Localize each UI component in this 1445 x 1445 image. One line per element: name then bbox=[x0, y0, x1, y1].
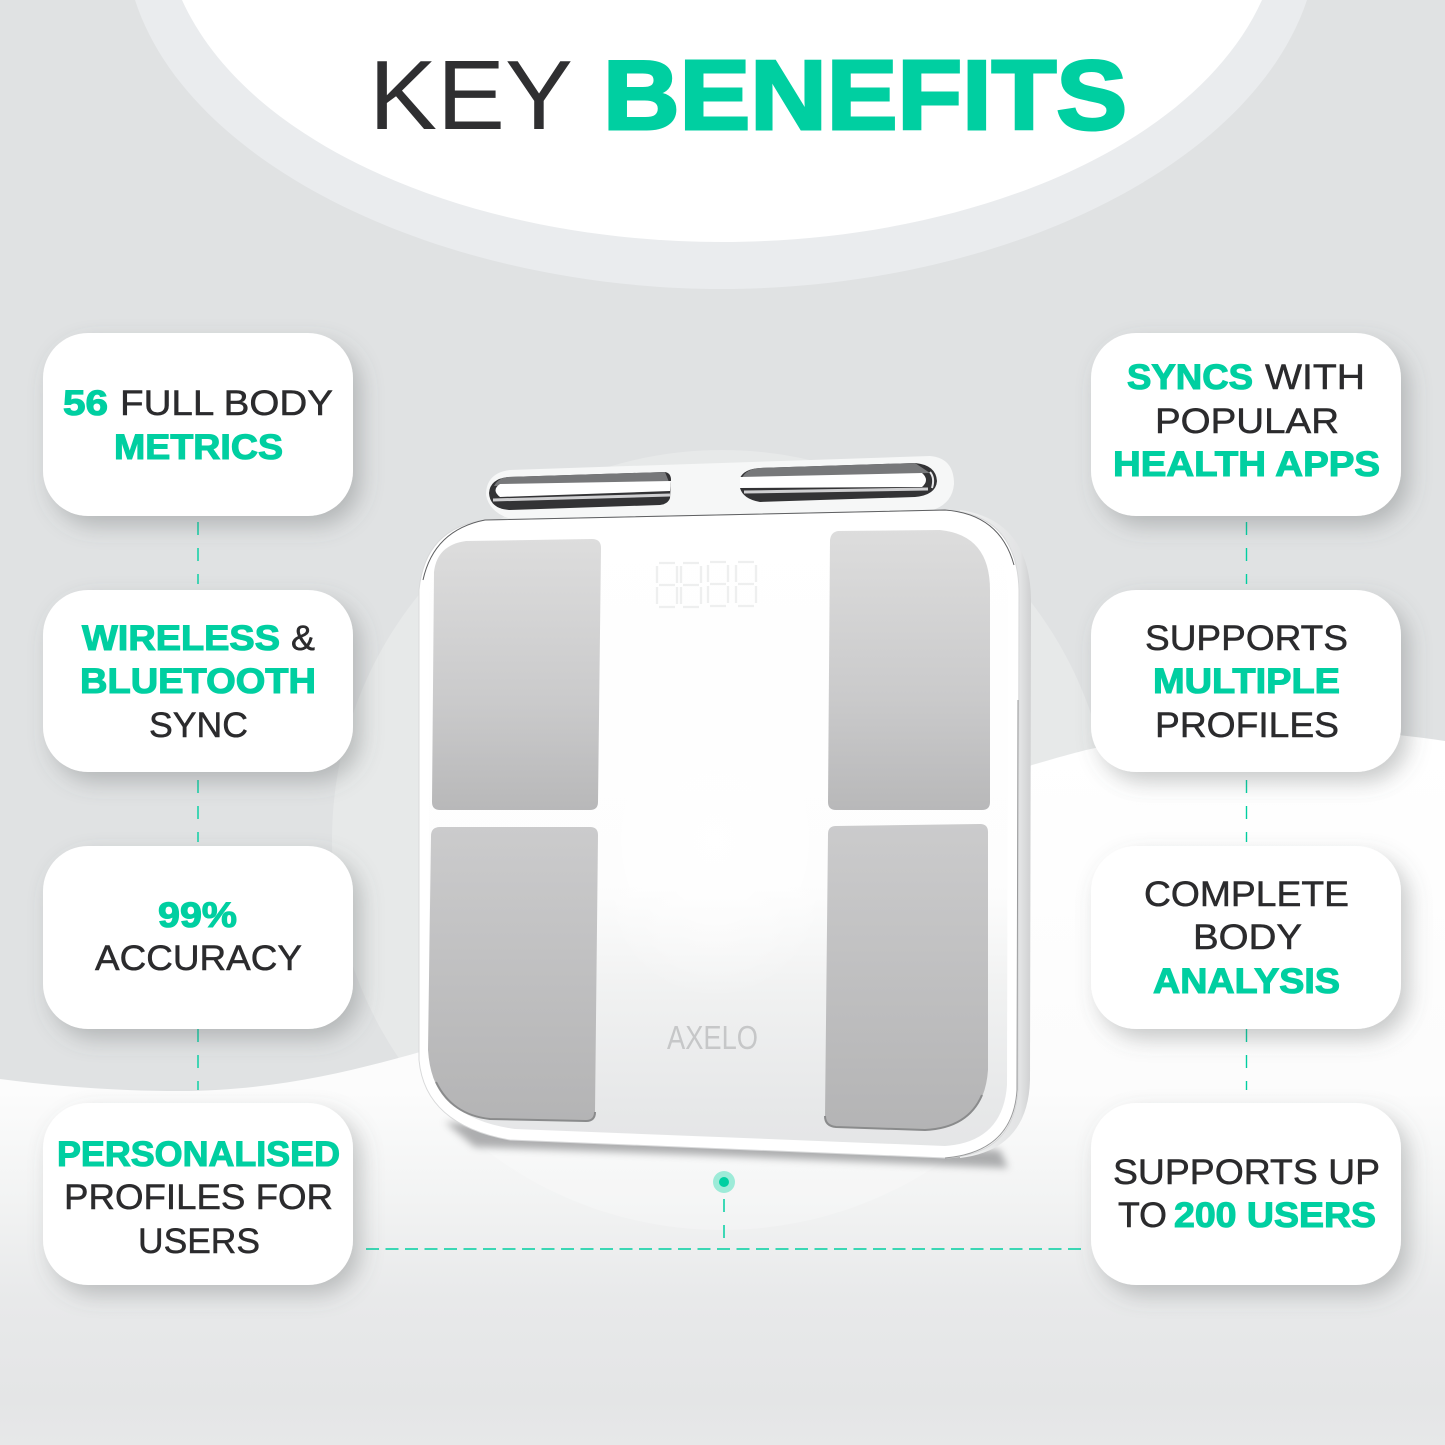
scale face bbox=[429, 520, 1008, 1146]
handle bbox=[486, 456, 954, 521]
panel: wireless and bluetooth sync: SYNC bbox=[149, 706, 248, 745]
panel: 56 full body metrics: 56 bbox=[63, 384, 108, 423]
scale right edge line bbox=[945, 700, 1018, 1158]
panel: wireless and bluetooth sync: BLUETOOTH bbox=[80, 662, 316, 701]
panel: syncs with health apps: HEALTH APPS bbox=[1113, 445, 1380, 484]
panel: supports up to 200 users: TO bbox=[1118, 1196, 1167, 1235]
panel: syncs with health apps: WITH bbox=[1265, 358, 1365, 397]
panel: 56 full body metrics: FULL BODY bbox=[120, 384, 333, 423]
connector: left column bbox=[197, 522, 199, 1090]
panel: wireless and bluetooth sync: & bbox=[291, 619, 315, 658]
panel: supports up to 200 users: 200 USERS bbox=[1174, 1196, 1376, 1235]
connector: right column bbox=[1246, 522, 1248, 1090]
panel: syncs with health apps bbox=[1091, 333, 1401, 516]
panel: 56 full body metrics: METRICS bbox=[114, 428, 283, 467]
panel: 99% accuracy: ACCURACY bbox=[95, 939, 302, 978]
panel: supports multiple profiles: SUPPORTS bbox=[1145, 619, 1348, 658]
header arc: outer bbox=[135, 0, 1307, 289]
panel: personalised profiles bbox=[43, 1103, 353, 1285]
title: BENEFITS bbox=[603, 40, 1127, 150]
scale brand logo: AXELO bbox=[667, 1019, 758, 1056]
foot pad bottom right bbox=[825, 824, 988, 1130]
title: KEY bbox=[369, 40, 573, 150]
foot pad bottom left edge bbox=[436, 1082, 595, 1121]
title bbox=[369, 40, 1127, 150]
right chrome bar bbox=[740, 463, 937, 502]
marker dot bbox=[713, 1171, 735, 1193]
panel: wireless and bluetooth sync bbox=[43, 590, 353, 772]
panel: 56 full body metrics bbox=[43, 333, 353, 516]
foot pad top left bbox=[432, 539, 601, 810]
digit display bbox=[657, 562, 756, 607]
panel: complete body analysis: COMPLETE bbox=[1144, 875, 1349, 914]
panel: complete body analysis: BODY bbox=[1193, 918, 1302, 957]
panel: supports multiple profiles bbox=[1091, 590, 1401, 772]
panel: personalised profiles: PROFILES FOR bbox=[64, 1178, 333, 1217]
panel: syncs with health apps: POPULAR bbox=[1155, 402, 1339, 441]
scale centre glow bbox=[585, 680, 845, 1000]
panel: complete body analysis: ANALYSIS bbox=[1153, 962, 1340, 1001]
panel: complete body analysis bbox=[1091, 846, 1401, 1029]
panel: supports multiple profiles: PROFILES bbox=[1155, 706, 1339, 745]
connector: horizontal bbox=[366, 1248, 1081, 1250]
scale side edge bbox=[960, 510, 1031, 1158]
scale rim bbox=[419, 510, 1019, 1158]
bottom wave panel bbox=[0, 729, 1445, 1445]
panel: supports up to 200 users: SUPPORTS UP bbox=[1113, 1153, 1380, 1192]
header arc: inner bbox=[182, 0, 1262, 242]
panel: syncs with health apps: SYNCS bbox=[1127, 358, 1253, 397]
panel: personalised profiles: PERSONALISED bbox=[57, 1135, 340, 1174]
left chrome bar bbox=[489, 472, 671, 510]
panel: personalised profiles: USERS bbox=[138, 1222, 260, 1261]
product: smart scale bbox=[419, 456, 1031, 1168]
scale top edge line bbox=[423, 510, 1014, 580]
panel: 99% accuracy: 99% bbox=[158, 896, 237, 935]
panel: 99% accuracy bbox=[43, 846, 353, 1029]
panel: supports multiple profiles: MULTIPLE bbox=[1153, 662, 1340, 701]
halo circle behind scale bbox=[332, 450, 1112, 1230]
foot pad top right bbox=[828, 530, 990, 810]
panel: wireless and bluetooth sync: WIRELESS bbox=[82, 619, 280, 658]
foot pad bottom right edge bbox=[825, 1095, 982, 1130]
foot pad bottom left bbox=[428, 827, 598, 1121]
connector: scale to line bbox=[723, 1199, 725, 1238]
panel: supports up to 200 users bbox=[1091, 1103, 1401, 1285]
scale floor shadow bbox=[445, 1122, 1008, 1168]
